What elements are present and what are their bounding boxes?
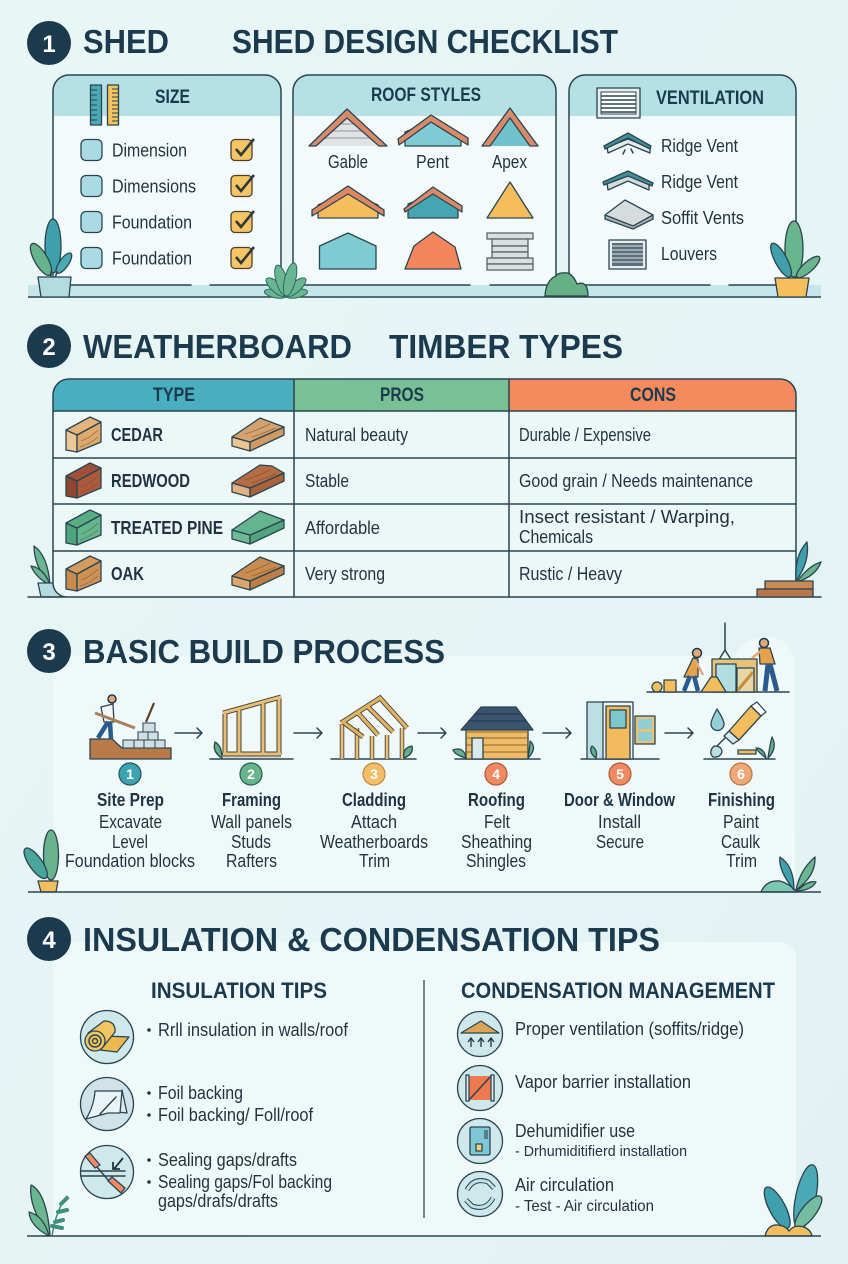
step text bbox=[65, 790, 195, 871]
arrow bbox=[418, 728, 446, 738]
plant: process right bbox=[761, 857, 816, 892]
icon: teal house bbox=[320, 233, 376, 269]
icon: stacked slabs bbox=[487, 233, 533, 270]
row: oak: OAK bbox=[111, 564, 144, 584]
tip: sealing gaps: Sealing gaps/drafts bbox=[158, 1150, 297, 1170]
icon: apex roof bbox=[482, 108, 538, 146]
plant: left potted bbox=[26, 219, 74, 297]
table header: TYPE bbox=[153, 385, 195, 406]
row: treated pine: Insect resistant / Warping, bbox=[519, 507, 735, 527]
icon: caulk tube and drop bbox=[704, 702, 775, 759]
step text: Attach bbox=[351, 812, 397, 832]
section number 4: 4 bbox=[42, 927, 56, 954]
section number 4 bbox=[27, 917, 71, 961]
step text: Secure bbox=[596, 832, 644, 852]
tip: vapor barrier: Vapor barrier installation bbox=[515, 1072, 691, 1092]
heading: shed design checklist: SHED DESIGN CHECKLIST bbox=[232, 23, 618, 60]
plant: process left bbox=[20, 830, 58, 892]
heading: weatherboard: WEATHERBOARD bbox=[83, 328, 352, 365]
step 5: door and window bbox=[564, 702, 676, 852]
icon: rulers bbox=[90, 85, 118, 125]
tip: air circulation: Air circulation bbox=[515, 1175, 614, 1195]
step text: Trim bbox=[359, 851, 390, 871]
row: oak bbox=[66, 556, 622, 591]
icon: orange triangle bbox=[487, 182, 533, 218]
step badge 5: 5 bbox=[616, 766, 624, 782]
label: gable: Gable bbox=[328, 152, 368, 172]
arrow bbox=[294, 728, 322, 738]
step text: Rafters bbox=[226, 851, 277, 871]
icon: louvers bbox=[609, 240, 646, 269]
plant: centre leaves bbox=[263, 262, 309, 300]
tip: foil backing: Foil backing bbox=[158, 1083, 243, 1103]
row: redwood: Stable bbox=[305, 471, 349, 491]
row: redwood bbox=[66, 463, 753, 498]
step text: Studs bbox=[231, 832, 271, 852]
icon: orange gable bbox=[312, 186, 384, 218]
table header: CONS bbox=[630, 385, 676, 406]
tip: roll insulation: Rrll insulation in walls/roof bbox=[158, 1020, 349, 1040]
icon: ridge vent one bbox=[604, 133, 651, 154]
icon: pent roof bbox=[398, 115, 468, 146]
step text: Caulk bbox=[721, 832, 761, 852]
step badge 2: 2 bbox=[247, 766, 255, 782]
icon: soffit vent bbox=[605, 200, 653, 229]
step badge 1: 1 bbox=[126, 766, 134, 782]
tip: foil backing bbox=[147, 1083, 314, 1125]
plant: table left bbox=[31, 546, 62, 597]
step text: Felt bbox=[484, 812, 510, 832]
checklist rows: Foundation bbox=[112, 212, 192, 232]
arrow bbox=[665, 728, 693, 738]
step text bbox=[211, 790, 292, 871]
step text bbox=[708, 790, 775, 871]
icon: roof frame bbox=[331, 698, 416, 759]
step badge 2 bbox=[240, 763, 262, 785]
heading: timber types: TIMBER TYPES bbox=[389, 328, 623, 365]
ground line bbox=[28, 891, 821, 893]
step text: Site Prep bbox=[97, 790, 164, 810]
step text: Shingles bbox=[466, 851, 526, 871]
section number 1: 1 bbox=[42, 31, 56, 58]
plant: bottom right bbox=[759, 1163, 826, 1236]
heading: condensation management: CONDENSATION MANAGEMENT bbox=[461, 978, 776, 1003]
plant and lumber: table right bbox=[757, 542, 821, 597]
section 2: weatherboard timber types bbox=[27, 324, 821, 597]
tip: air circulation bbox=[515, 1175, 654, 1215]
row: redwood: REDWOOD bbox=[111, 471, 190, 491]
panel: ventilation bbox=[569, 75, 796, 285]
icon: dehumidifier bbox=[458, 1118, 502, 1164]
step text bbox=[320, 790, 428, 871]
step 1: site prep bbox=[65, 695, 195, 871]
step text: Cladding bbox=[342, 790, 406, 810]
heading: insulation and condensation tips: INSULATION & CONDENSATION TIPS bbox=[83, 921, 660, 958]
step text: Foundation blocks bbox=[65, 851, 195, 871]
icon: sealing gaps bbox=[80, 1146, 134, 1198]
row: cedar: CEDAR bbox=[111, 425, 163, 445]
checklist rows: Dimensions bbox=[112, 176, 196, 196]
table header: PROS bbox=[380, 385, 424, 406]
tip: dehumidifier: - Drhumiditifierd installation bbox=[515, 1143, 687, 1160]
row: treated pine: TREATED PINE bbox=[111, 518, 223, 538]
step text: Framing bbox=[222, 790, 281, 810]
step 6: finishing bbox=[704, 702, 775, 871]
icon: door and window bbox=[581, 702, 659, 759]
plant: right potted bbox=[767, 221, 823, 297]
section number 2 bbox=[27, 324, 71, 368]
label: ridge vent: Ridge Vent bbox=[661, 136, 738, 156]
step badge 4: 4 bbox=[492, 766, 500, 782]
heading: roof styles: ROOF STYLES bbox=[371, 85, 481, 106]
step 3: cladding bbox=[320, 698, 428, 871]
step badge 6: 6 bbox=[737, 766, 745, 782]
icon: worker and blocks bbox=[90, 695, 171, 759]
label: soffit vents: Soffit Vents bbox=[661, 208, 744, 228]
section 4: insulation and condensation tips bbox=[27, 917, 826, 1236]
ground line bbox=[28, 296, 821, 298]
step text: Excavate bbox=[99, 812, 162, 832]
checklist rows bbox=[81, 139, 254, 268]
checklist rows: Dimension bbox=[112, 140, 187, 160]
step 2: framing bbox=[210, 697, 293, 871]
table: timber types bbox=[28, 379, 821, 597]
row: treated pine: Chemicals bbox=[519, 527, 593, 547]
section number 1 bbox=[27, 21, 71, 65]
icon: ridge vent two bbox=[603, 171, 653, 190]
step text: Wall panels bbox=[211, 812, 292, 832]
icon: vapor barrier bbox=[458, 1066, 502, 1110]
icon: teal gable bbox=[404, 187, 462, 218]
section number 2: 2 bbox=[42, 334, 56, 361]
heading: basic build process: BASIC BUILD PROCESS bbox=[83, 633, 445, 670]
step text: Finishing bbox=[708, 790, 775, 810]
row: redwood: Good grain / Needs maintenance bbox=[519, 471, 753, 491]
row: treated pine: Affordable bbox=[305, 518, 380, 538]
tip: foil backing: Foil backing/ Foll/roof bbox=[158, 1105, 314, 1125]
heading: ventilation: VENTILATION bbox=[656, 88, 764, 109]
step text: Install bbox=[598, 812, 641, 832]
step badge 6 bbox=[730, 763, 752, 785]
section 3: basic build process bbox=[20, 623, 821, 892]
column: insulation tips bbox=[80, 978, 349, 1211]
panel background bbox=[53, 637, 795, 892]
ground line bbox=[27, 1235, 821, 1237]
step badge 4 bbox=[485, 763, 507, 785]
icon: ventilation arrows bbox=[458, 1012, 502, 1056]
plant: bottom left bbox=[29, 1185, 67, 1236]
step badge 3 bbox=[363, 763, 385, 785]
arrow bbox=[543, 728, 571, 738]
label: apex: Apex bbox=[492, 152, 527, 172]
icon: insulation roll bbox=[80, 1010, 134, 1064]
heading: size: SIZE bbox=[155, 87, 190, 108]
checklist rows: Foundation bbox=[112, 248, 192, 268]
table header bbox=[53, 379, 796, 411]
row: oak: Rustic / Heavy bbox=[519, 564, 622, 584]
icon: vent grille bbox=[597, 88, 640, 118]
step text bbox=[564, 790, 676, 852]
section number 3: 3 bbox=[42, 639, 56, 666]
step text: Door & Window bbox=[564, 790, 676, 810]
step text: Sheathing bbox=[461, 832, 532, 852]
row: oak: Very strong bbox=[305, 564, 385, 584]
icon: wall frame bbox=[210, 697, 293, 759]
illustration: workers with crane load bbox=[647, 623, 789, 692]
step badge 5 bbox=[609, 763, 631, 785]
label: louvers: Louvers bbox=[661, 244, 717, 264]
step text: Level bbox=[112, 832, 148, 852]
step 4: roofing bbox=[453, 707, 540, 871]
ground band bbox=[28, 285, 821, 297]
panel: roof styles bbox=[293, 75, 556, 285]
step text: Paint bbox=[723, 812, 759, 832]
step badge 3: 3 bbox=[370, 766, 378, 782]
icon: house with shingles bbox=[453, 707, 540, 759]
step text bbox=[461, 790, 532, 871]
step text: Roofing bbox=[468, 790, 525, 810]
tip: dehumidifier bbox=[515, 1121, 687, 1160]
tip: sealing gaps: Sealing gaps/Fol backing bbox=[158, 1172, 332, 1192]
icon: air circulation bbox=[458, 1172, 502, 1216]
row: cedar: Natural beauty bbox=[305, 425, 408, 445]
heading: insulation tips: INSULATION TIPS bbox=[151, 978, 327, 1003]
tip: proper ventilation: Proper ventilation (soffits/ridge) bbox=[515, 1019, 744, 1039]
icon: foil backing bbox=[80, 1078, 134, 1130]
tip: sealing gaps bbox=[147, 1150, 332, 1211]
row: treated pine bbox=[66, 507, 735, 547]
column divider bbox=[423, 980, 425, 1218]
tip: air circulation: - Test - Air circulation bbox=[515, 1198, 654, 1215]
step badge 1 bbox=[119, 763, 141, 785]
icon: orange barn bbox=[405, 232, 461, 269]
icon: gable roof bbox=[309, 109, 387, 146]
tip: dehumidifier: Dehumidifier use bbox=[515, 1121, 635, 1141]
plant: bush bbox=[545, 273, 588, 296]
heading: shed: SHED bbox=[83, 23, 169, 60]
step text: Weatherboards bbox=[320, 832, 428, 852]
section 1: shed design checklist bbox=[26, 21, 823, 300]
panel: size bbox=[53, 75, 281, 285]
column: condensation management bbox=[458, 978, 776, 1216]
arrow bbox=[175, 728, 202, 738]
section number 3 bbox=[27, 629, 71, 673]
panel background bbox=[53, 942, 796, 1236]
row: cedar bbox=[66, 417, 651, 452]
label: pent: Pent bbox=[416, 152, 449, 172]
row: cedar: Durable / Expensive bbox=[519, 425, 651, 445]
label: ridge vent: Ridge Vent bbox=[661, 172, 738, 192]
tip: sealing gaps: gaps/drafs/drafts bbox=[158, 1191, 278, 1211]
step text: Trim bbox=[726, 851, 757, 871]
